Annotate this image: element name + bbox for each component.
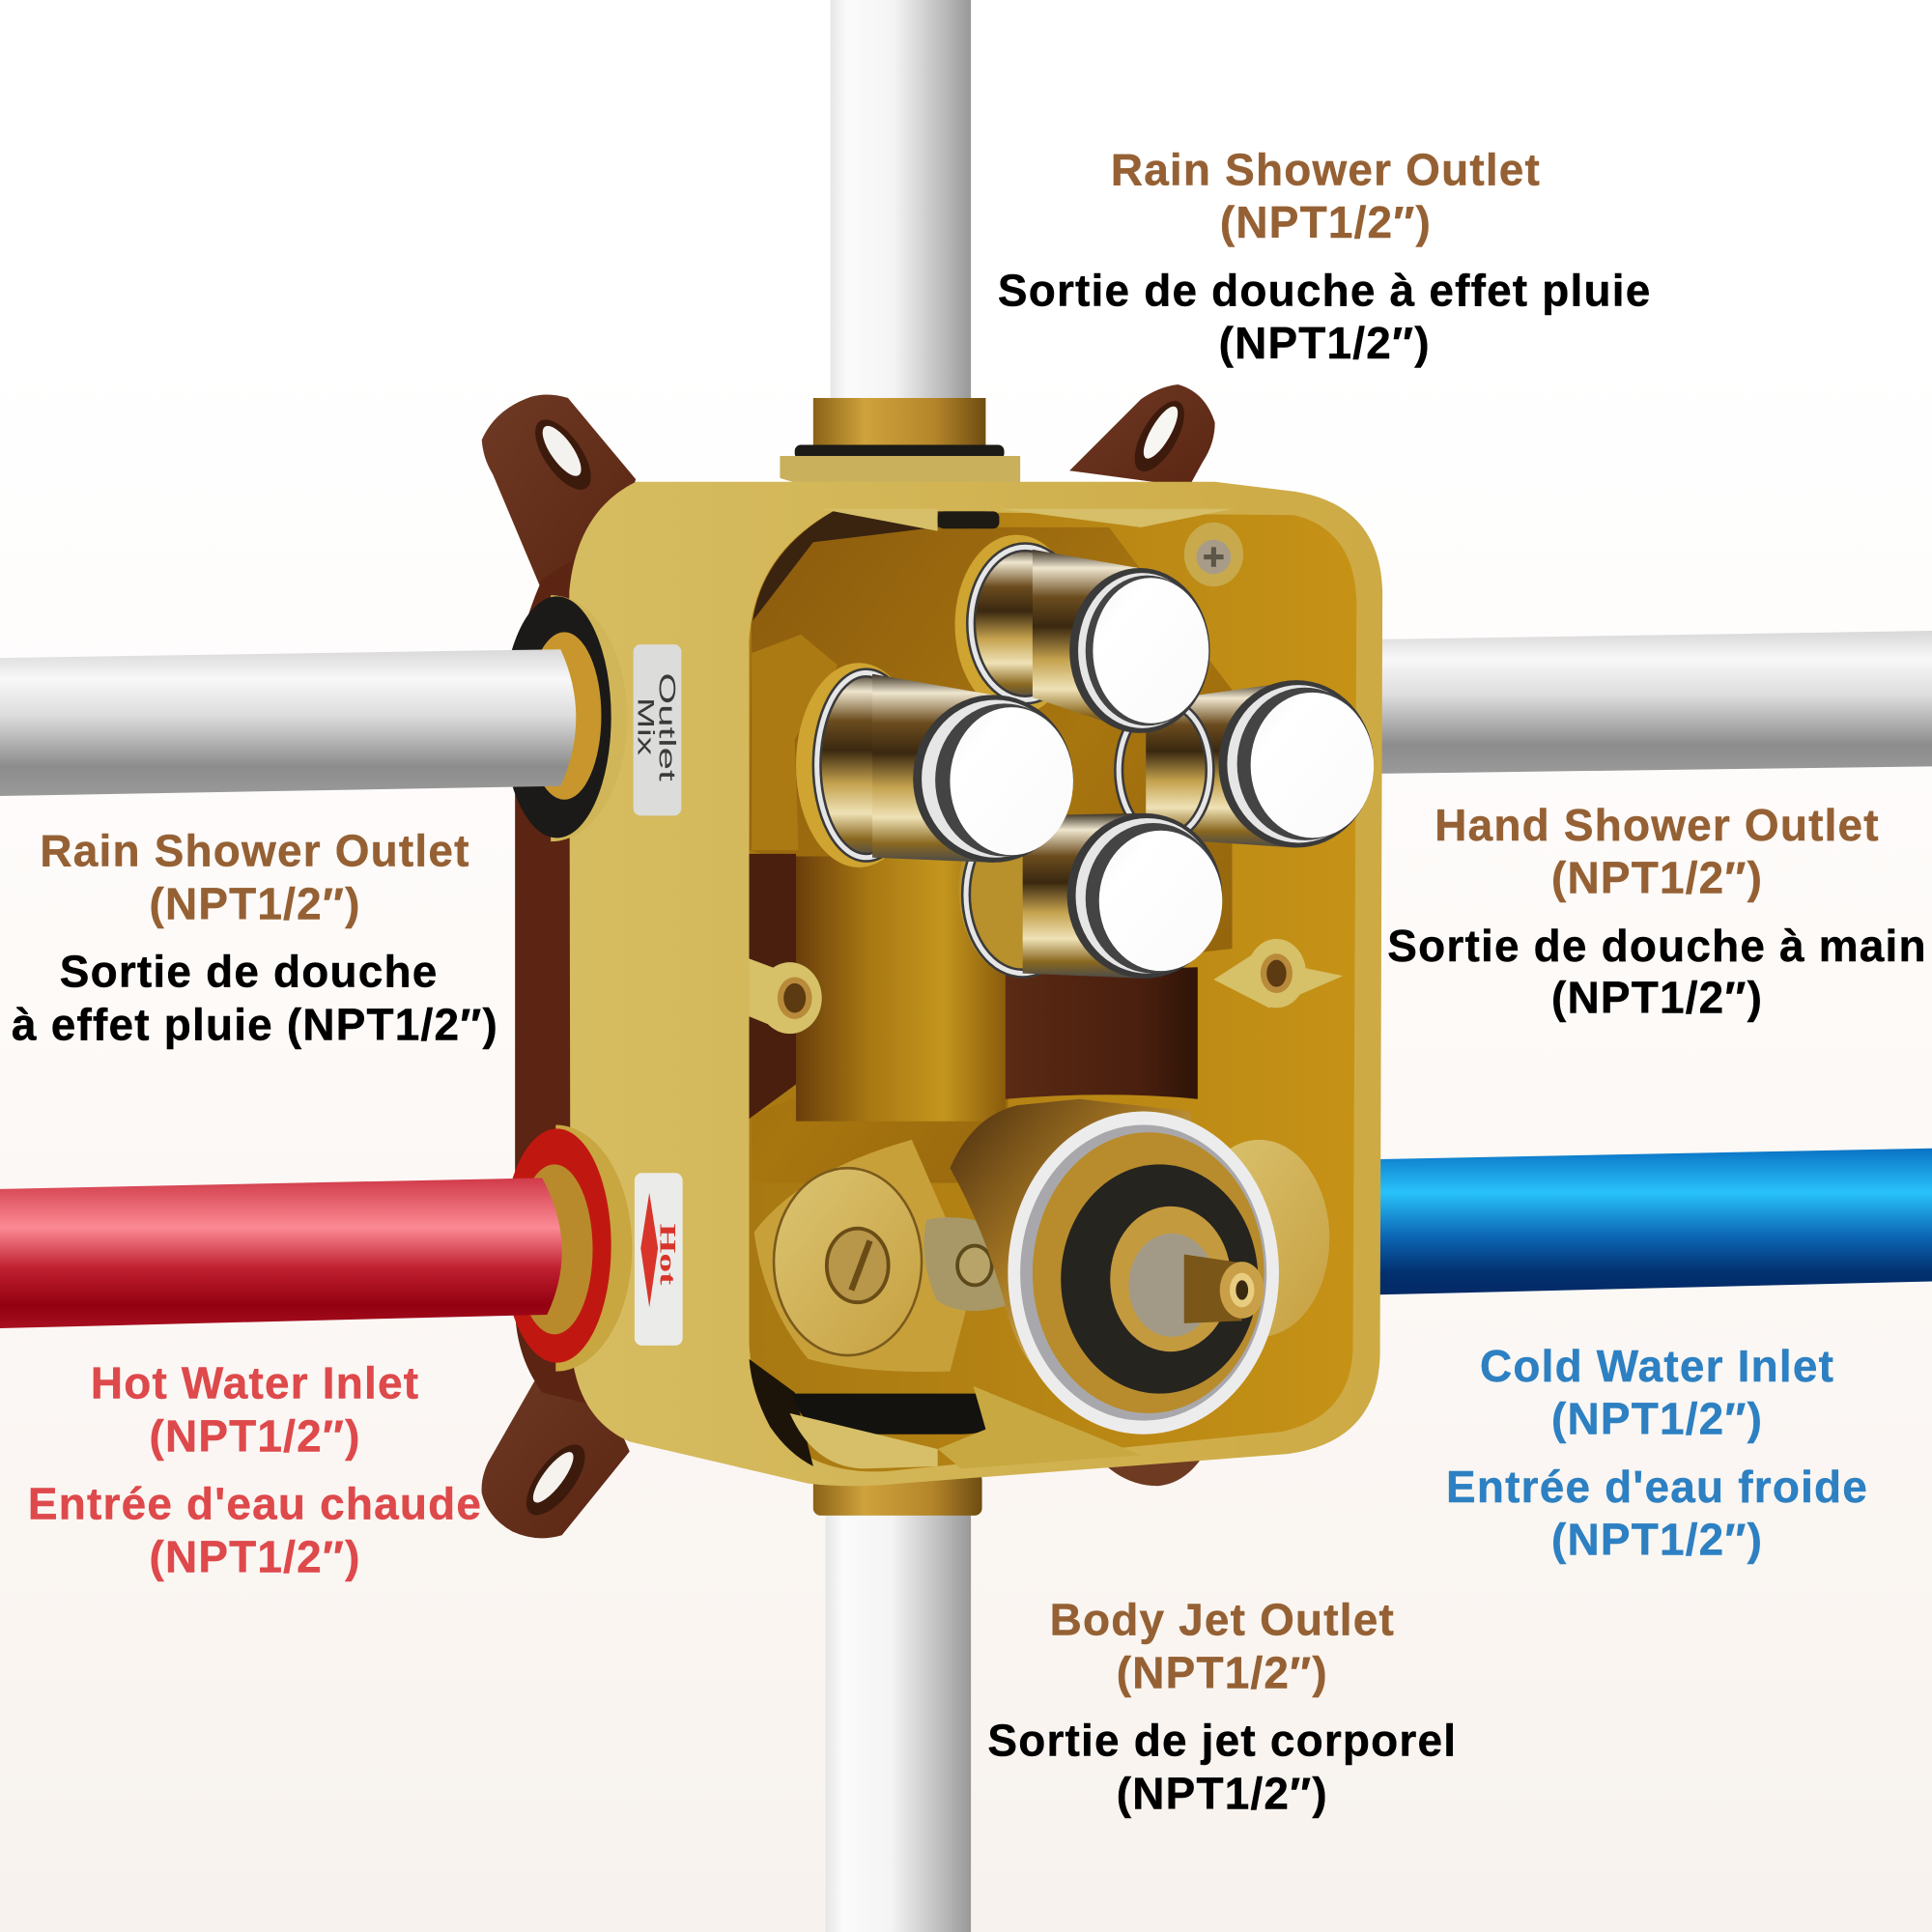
callout: left rain shower outlet: Sortie de douche (60, 947, 439, 997)
ledge: bottom lip (790, 1413, 938, 1468)
pipe: right hand shower outlet (1368, 631, 1932, 774)
callout: hot water inlet: Hot Water Inlet (91, 1358, 419, 1408)
callout: cold water inlet: (NPT1/2″) (1551, 1394, 1763, 1444)
label plate: Outlet Mix: Outlet (653, 672, 679, 781)
cavity: right (1006, 967, 1198, 1099)
cast brass body: vertical trunk (796, 856, 1006, 1122)
pipe: hot water inlet (0, 1178, 562, 1328)
callout: left rain shower outlet: à effet pluie (NPT1/2″) (12, 1000, 498, 1050)
black dial (1061, 1164, 1258, 1394)
cavity top shadow (752, 511, 985, 629)
callout: cold water inlet (1446, 1341, 1868, 1565)
dark corner: lower left (750, 1359, 813, 1466)
screw (1184, 523, 1243, 586)
chrome cartridge: left (796, 663, 1073, 867)
callout: body jet outlet: Body Jet Outlet (1050, 1595, 1395, 1645)
label plate: Outlet Mix: Mix (633, 697, 659, 755)
chrome cartridge: top (955, 535, 1210, 733)
callout: body jet outlet: Sortie de jet corporel (987, 1716, 1457, 1766)
washer: top (780, 444, 1020, 497)
valve assembly (0, 384, 1382, 1538)
port: left outlet ring (502, 595, 627, 841)
callout: hand shower outlet (1387, 800, 1927, 1022)
callout: body jet outlet: (NPT1/2″) (1117, 1647, 1328, 1697)
brass disc: left with slotted screw (754, 1140, 974, 1372)
callout: body jet outlet (987, 1595, 1457, 1818)
brass collar: top (813, 398, 985, 460)
callout: cold water inlet: Cold Water Inlet (1480, 1341, 1834, 1391)
chrome cartridge: right (1119, 680, 1374, 848)
callout: hot water inlet: Entrée d'eau chaude (28, 1479, 482, 1529)
callout: top rain shower outlet: (NPT1/2″) (1220, 197, 1432, 247)
callout: cold water inlet: Entrée d'eau froide (1446, 1462, 1868, 1512)
callout: cold water inlet: (NPT1/2″) (1551, 1515, 1763, 1565)
brass collar: bottom (813, 1472, 982, 1516)
back plate (515, 518, 640, 1417)
callout: hand shower outlet: Hand Shower Outlet (1435, 800, 1880, 850)
brass hex and stem (1110, 1207, 1264, 1351)
mounting boss: left (750, 958, 822, 1034)
callout: top rain shower outlet: (NPT1/2″) (1219, 318, 1431, 368)
callout: hot water inlet: (NPT1/2″) (149, 1532, 361, 1582)
pipe: top rain shower outlet (831, 0, 971, 407)
inner bottom wall (938, 1386, 1141, 1468)
label plate: Hot with arrow: Hot (656, 1224, 680, 1286)
callout: hand shower outlet: (NPT1/2″) (1551, 853, 1763, 903)
pipe: cold water inlet (1368, 1149, 1932, 1295)
cast highlight: left of cartridges (752, 635, 838, 850)
mounting lug: top right (1069, 384, 1215, 487)
pipe: bottom body jet outlet (826, 1506, 971, 1932)
cast brass body: upper manifold (750, 527, 1233, 1182)
callout: body jet outlet: (NPT1/2″) (1117, 1768, 1328, 1818)
callout: hand shower outlet: Sortie de douche à main (1387, 921, 1927, 971)
callout: left rain shower outlet: Rain Shower Outlet (40, 826, 470, 876)
chrome barrel behind escutcheon (950, 1099, 1213, 1405)
ledge: top lip (820, 509, 1233, 531)
chrome escutcheon ring (1008, 1112, 1279, 1435)
callout: top rain shower outlet: Rain Shower Outlet (1111, 144, 1541, 194)
cavity: left (750, 854, 796, 1119)
black gasket: bottom (792, 1394, 997, 1435)
brass disc: right behind (1189, 1140, 1329, 1337)
callout: top rain shower outlet (998, 144, 1651, 368)
mounting lug: top left (482, 394, 636, 591)
label plate: Hot with arrow (635, 1173, 683, 1346)
mounting boss: right (1213, 939, 1343, 1008)
label plate: Outlet Mix (633, 644, 681, 815)
plastic housing shell (569, 482, 1382, 1486)
inner cavity of housing (750, 511, 1356, 1471)
plate with small screw (923, 1217, 1006, 1311)
chrome cartridge: bottom (958, 804, 1222, 979)
port: hot inlet ring (502, 1125, 632, 1372)
mounting lug: bottom right (1104, 1460, 1200, 1486)
pipe: left rain shower outlet (0, 649, 576, 796)
callout: hot water inlet (28, 1358, 482, 1582)
callout: top rain shower outlet: Sortie de douche à effet pluie (998, 265, 1651, 315)
callout: hand shower outlet: (NPT1/2″) (1551, 972, 1763, 1022)
callout: left rain shower outlet: (NPT1/2″) (149, 879, 361, 929)
callout: hot water inlet: (NPT1/2″) (149, 1411, 361, 1462)
mounting lug: bottom left (482, 1368, 630, 1538)
callout: left rain shower outlet (12, 826, 498, 1050)
